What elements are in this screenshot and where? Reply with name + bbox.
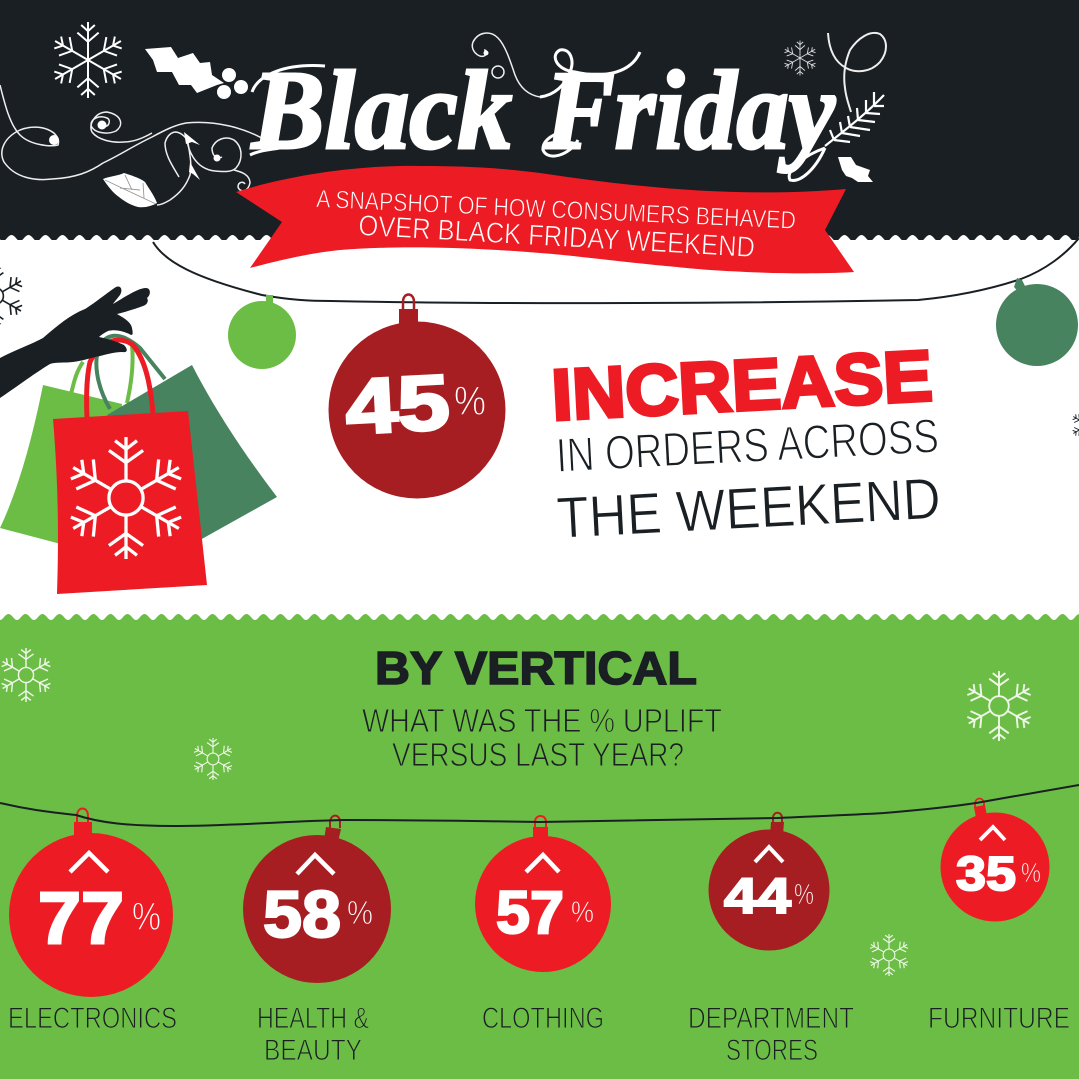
subheading: VERSUS LAST YEAR? [392, 736, 684, 773]
ornament: 57% clothing [475, 816, 611, 1035]
ornament: 77% electronics: % [132, 896, 161, 939]
headline: increase: INCREASE [550, 336, 934, 436]
ornament: 44% department stores: 44 [724, 868, 791, 924]
ornament: 35% furniture: 35 [956, 848, 1016, 901]
ornament: dark green [996, 278, 1078, 366]
icon: shopping bags with hand [0, 287, 277, 594]
small holly on flourish [184, 132, 200, 180]
ornament: 58% health and beauty: 58 [263, 877, 341, 951]
ornament: 35% furniture [928, 798, 1070, 1035]
ornament: 58% health and beauty [243, 816, 391, 1067]
ribbon text [316, 185, 797, 264]
subheading: WHAT WAS THE % UPLIFT [362, 702, 722, 739]
string: lower ornaments [0, 785, 1079, 826]
ornament: 45%: 45 [343, 358, 452, 451]
ornament: 44% department stores [688, 813, 854, 1067]
snowflake: green 3 [964, 671, 1034, 741]
string: upper ornaments [153, 238, 1079, 303]
ornament: light green [228, 295, 296, 369]
ornament: 45% [328, 294, 506, 498]
ornament: 58% health and beauty: % [347, 894, 373, 931]
ornament: 35% furniture: % [1021, 857, 1041, 888]
icon: leaf [103, 173, 157, 207]
snowflake: right edge [1071, 408, 1079, 442]
ribbon text: OVER BLACK FRIDAY WEEKEND [358, 210, 756, 264]
icon: pine sprig [825, 92, 884, 146]
ornament: 57% clothing: % [571, 896, 594, 929]
label [688, 1002, 854, 1067]
header background [0, 0, 1079, 240]
ornament: 77% electronics [8, 808, 177, 1035]
heading: by vertical: BY VERTICAL [375, 642, 697, 694]
label: BEAUTY [264, 1034, 362, 1067]
snowflake: green 2 [192, 738, 234, 780]
title: Friday [544, 49, 836, 173]
label: CLOTHING [482, 1002, 604, 1035]
title [250, 49, 836, 180]
ornament: 45%: % [454, 378, 486, 424]
label [257, 1002, 369, 1067]
label: STORES [726, 1034, 818, 1067]
ornament: 44% department stores: % [794, 879, 814, 911]
title: Black [250, 49, 512, 173]
label: HEALTH & [257, 1002, 369, 1035]
snowflake: green 1 [0, 648, 53, 702]
ribbon banner [236, 166, 854, 273]
text: in orders across: IN ORDERS ACROSS [555, 410, 940, 483]
green section background [0, 622, 1079, 1079]
snowflake: header left [50, 22, 126, 98]
text: the weekend: THE WEEKEND [555, 466, 942, 551]
subheading [362, 702, 722, 773]
flourish swirls left [0, 33, 886, 205]
icon: holly leaf and berries [145, 47, 248, 99]
ornament: 77% electronics: 77 [38, 878, 124, 959]
label: DEPARTMENT [688, 1002, 854, 1035]
label: ELECTRONICS [8, 1002, 177, 1035]
ornament: 57% clothing: 57 [496, 879, 564, 946]
snowflake: left edge [0, 266, 25, 326]
dots on flourish [49, 50, 488, 162]
snowflake: green 4 [868, 934, 910, 976]
icon: small holly leaf [838, 157, 873, 182]
snowflake: header right [782, 40, 818, 76]
ribbon text: A SNAPSHOT OF HOW CONSUMERS BEHAVED [316, 185, 797, 235]
